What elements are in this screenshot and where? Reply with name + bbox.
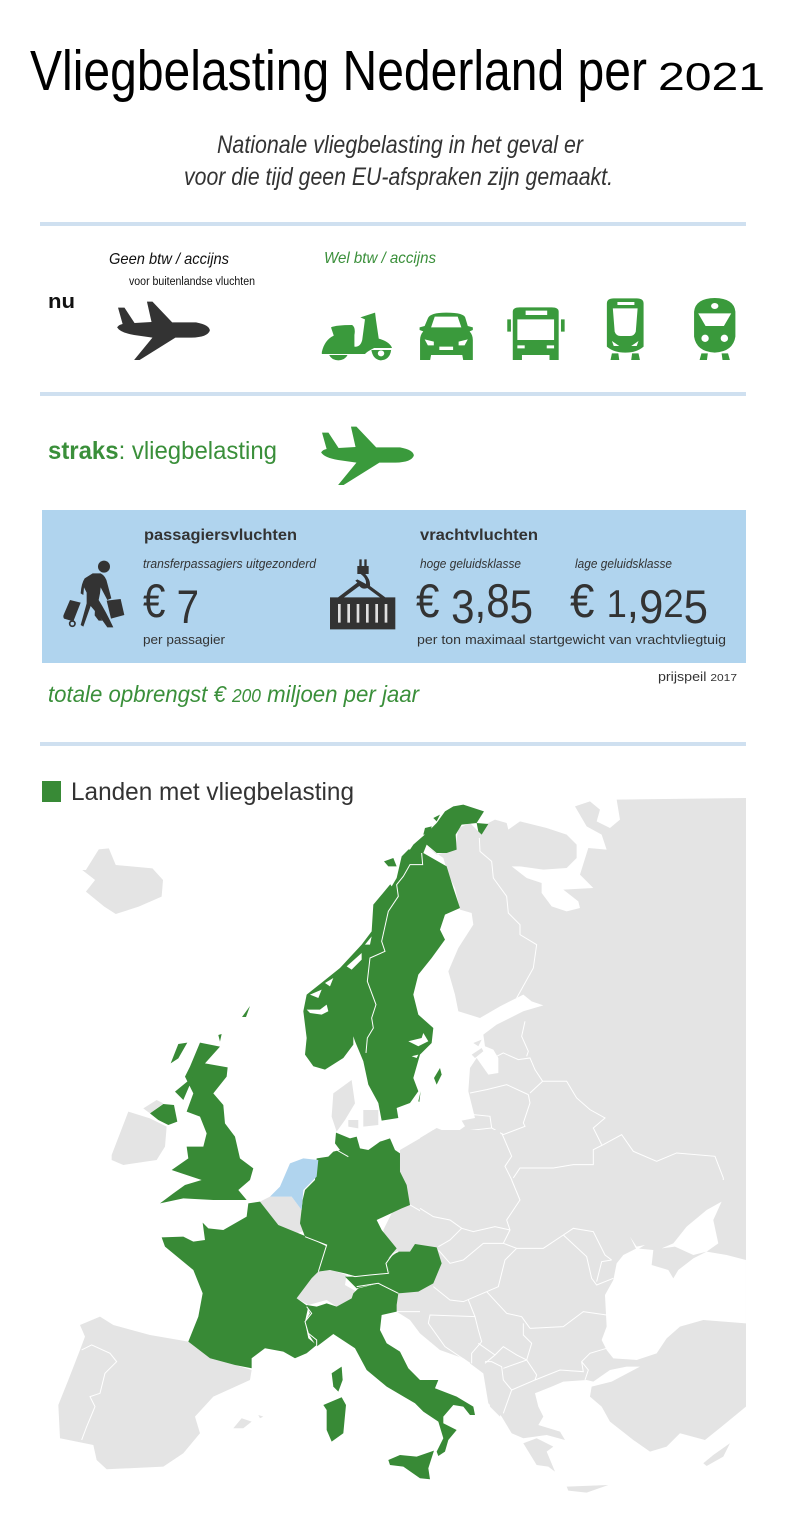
icon: traveller <box>63 561 124 627</box>
land: central europe <box>383 1130 500 1417</box>
title: Vliegbelasting Nederland per <box>30 39 647 103</box>
value: 7 euro: 7 <box>177 580 199 633</box>
countries: germany, austria, italy <box>300 1133 475 1479</box>
note: lage geluidsklasse: lage geluidsklasse <box>575 556 672 571</box>
icon: green plane <box>321 427 414 485</box>
land: iceland <box>82 848 163 914</box>
land: finland, baltics, russia <box>420 798 746 1198</box>
icon: train <box>694 298 735 360</box>
subtitle: Nationale vliegbelasting in het geval er <box>217 131 584 159</box>
value: 3,85 euro: € <box>416 574 442 627</box>
section: straks <box>48 427 414 485</box>
legend: Landen met vliegbelasting <box>71 778 354 806</box>
value: 1,925 euro: 2 <box>663 583 684 626</box>
heading: wel btw: Wel btw / accijns <box>324 250 436 267</box>
icon: container <box>330 559 395 629</box>
map: europe <box>58 798 746 1493</box>
label: nu: nu <box>48 291 75 313</box>
value: 1,925 euro: 9 <box>639 580 663 633</box>
title: 2021 <box>658 56 765 99</box>
section: nu <box>48 250 735 360</box>
icon: tram <box>607 298 644 360</box>
value: 1,925 euro: € 1, <box>570 574 640 627</box>
note: prijspeil: prijspeil 2017 <box>658 670 737 684</box>
note: buitenlandse vluchten: voor buitenlandse vluchten <box>129 276 255 288</box>
note: per passagier: per passagier <box>143 632 226 647</box>
note: per ton: per ton maximaal startgewicht van vrachtvliegtuig <box>417 632 726 647</box>
land: southeast europe <box>420 1180 746 1493</box>
land: western europe <box>58 1080 378 1469</box>
subtitle <box>184 131 613 191</box>
icon: scooter <box>322 313 392 360</box>
value: 3,85 euro: 5 <box>510 580 533 633</box>
heading: geen btw: Geen btw / accijns <box>109 251 229 268</box>
note: transferpassagiers: transferpassagiers uitgezonderd <box>143 556 317 571</box>
country: france <box>162 1202 327 1368</box>
note: hoge geluidsklasse: hoge geluidsklasse <box>420 556 521 571</box>
total revenue: totale opbrengst € 200 miljoen per jaar <box>48 681 420 707</box>
value: 1,925 euro: 5 <box>684 580 708 633</box>
value: 7 euro: € <box>143 574 169 627</box>
panel: tarieven <box>42 510 746 663</box>
value: 3,85 euro: ,8 <box>474 574 510 627</box>
subtitle: voor die tijd geen EU-afspraken zijn gemaakt. <box>184 163 613 191</box>
country: netherlands <box>270 1158 318 1210</box>
icon: dark plane <box>117 302 210 360</box>
icon: car <box>420 313 473 360</box>
heading: straks vliegbelasting: straks: vliegbelasting <box>48 437 277 465</box>
heading: vrachtvluchten: vrachtvluchten <box>420 527 538 544</box>
countries: norway and sweden <box>303 805 488 1121</box>
country: faroe islands <box>242 1006 250 1017</box>
countries: united kingdom <box>150 1034 253 1203</box>
value: 3,85 euro: 3 <box>451 580 474 633</box>
heading: passagiersvluchten: passagiersvluchten <box>144 527 297 544</box>
icon: bus <box>507 307 565 360</box>
